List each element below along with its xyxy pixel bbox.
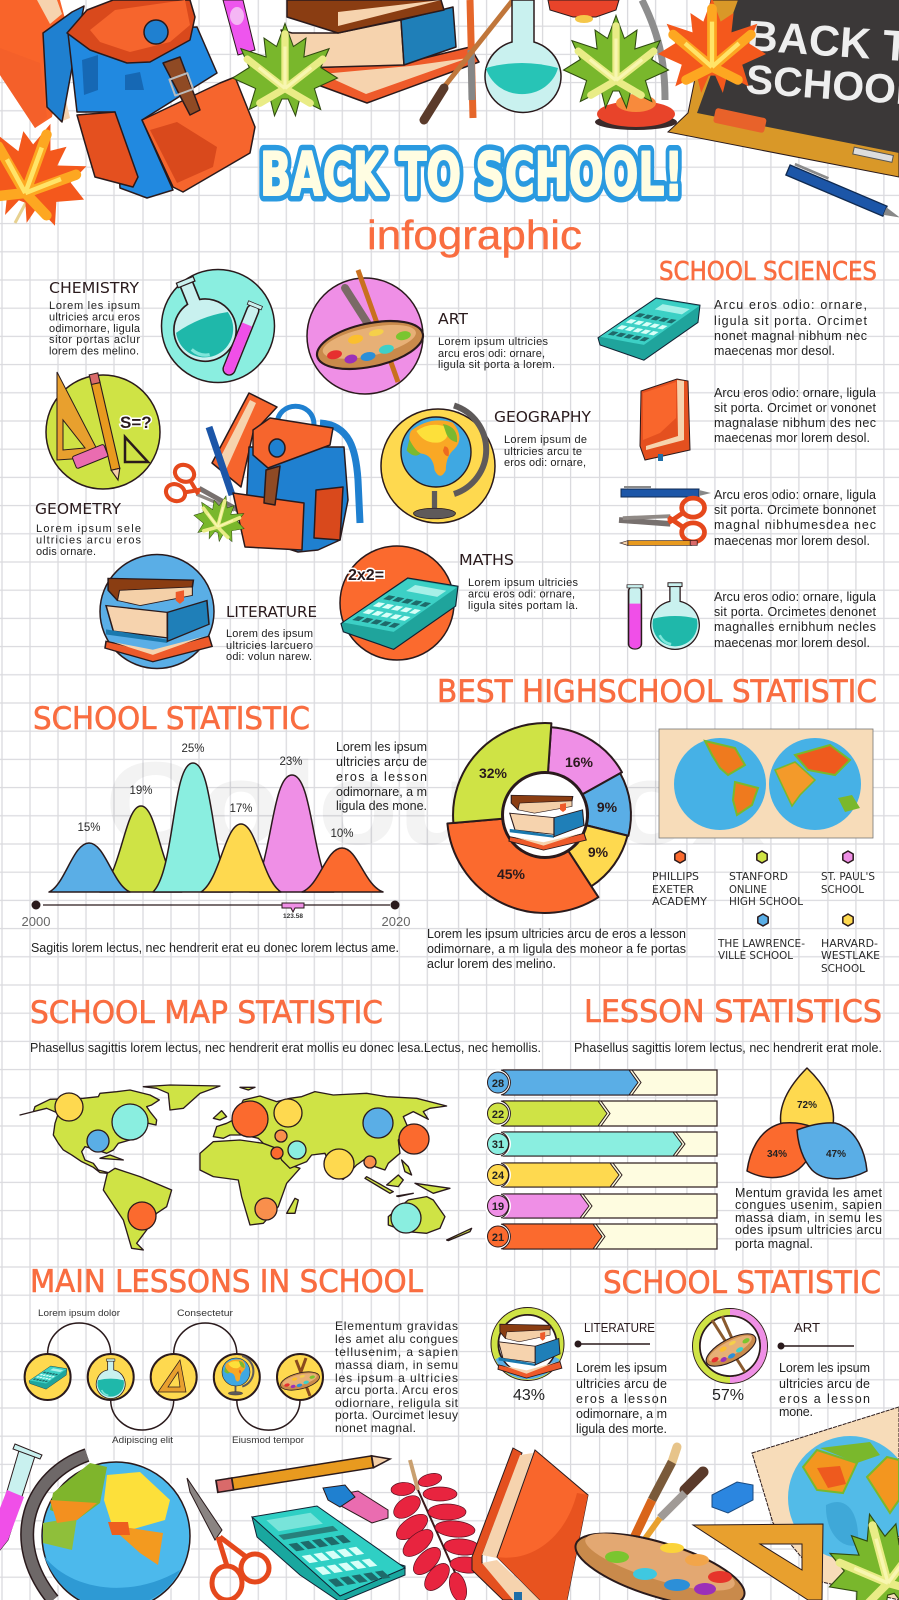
lesson labels: Lorem ipsum dolor (38, 1308, 120, 1319)
bar 22: 22 (492, 1109, 504, 1121)
donut labels: 32% (479, 765, 508, 781)
subject: geometry: ultricies arcu eros (36, 534, 142, 546)
art text: Lorem les ipsum (779, 1361, 870, 1375)
map intro text: Phasellus sagittis lorem lectus, nec hendrerit erat mollis eu donec lesa.Lectus, nec hemollis. (30, 1041, 541, 1055)
literature ring gauge (490, 1307, 564, 1404)
petal text: massa diam, in semu les (735, 1211, 882, 1225)
lessons text (335, 1319, 459, 1435)
lesson labels: Eiusmod tempor (232, 1435, 304, 1446)
horizontal bars (485, 1070, 717, 1250)
bottom illustration: pencil (216, 1453, 391, 1492)
chart value labels: 17% (229, 803, 253, 815)
subject: maths: 2x2= (348, 567, 384, 584)
donut labels: 16% (565, 754, 594, 770)
top illustration: orange book (0, 0, 70, 128)
text block 1: nonet magnal nibhum nec (714, 329, 867, 343)
heading: school statistic right: SCHOOL STATISTIC (603, 1265, 881, 1301)
petal text (735, 1186, 883, 1251)
lesson labels: Adipiscing elit (112, 1435, 173, 1446)
top illustration: brushes (424, 0, 513, 120)
legend: phillips exeter academy: PHILLIPS (652, 870, 699, 883)
legend: phillips exeter academy (652, 851, 707, 908)
art text: ART (794, 1320, 820, 1335)
text block 3: magnal nibhumesdea nec (714, 518, 876, 532)
side text: eros a lesson (336, 770, 427, 784)
legend: the lawrenceville school (717, 914, 805, 962)
legend: stanford online high school: ONLINE (729, 883, 767, 896)
bottom illustration: red leaf branch (390, 1460, 485, 1600)
donut center books (509, 795, 586, 850)
bell chart (49, 763, 383, 892)
side text: odimornare, a m (336, 785, 427, 799)
legend: harvard-westlake school: WESTLAKE (821, 949, 880, 962)
legend: the lawrenceville school: THE LAWRENCE- (717, 937, 805, 950)
top illustration: blackboard (668, 0, 899, 177)
text block 4 (714, 590, 877, 650)
timeline axis: 2020 (382, 914, 410, 929)
legend: st pauls school (821, 851, 875, 896)
literature text: eros a lesson (576, 1392, 667, 1406)
art text: mone. (779, 1405, 813, 1419)
petal text: Mentum gravida les amet (735, 1186, 883, 1200)
text block 2 (714, 386, 877, 445)
subtitle: infographic (367, 212, 582, 258)
subject: geography: Lorem ipsum de (504, 434, 587, 446)
art ring gauge: 57% (712, 1387, 744, 1404)
bar 21: 21 (492, 1232, 504, 1244)
lesson icon: palette (277, 1354, 323, 1400)
panel: school subjects (35, 268, 592, 668)
bar 31 (485, 1131, 717, 1157)
legend: stanford online high school (729, 851, 804, 908)
map bubbles (55, 1093, 429, 1233)
subject: geometry: Lorem ipsum sele (36, 523, 141, 535)
legend (652, 851, 880, 975)
bottom illustration: calculator (252, 1506, 405, 1600)
bottom illustration: scissors (187, 1478, 269, 1600)
subject: literature: ultricies larcuero (226, 640, 313, 652)
art text: eros a lesson (779, 1392, 870, 1406)
legend: phillips exeter academy: EXETER (652, 883, 694, 896)
world map (20, 1085, 472, 1250)
petal text: porta magnal. (735, 1237, 813, 1251)
chart value labels: 15% (77, 822, 101, 834)
subject: geography: ultricies arcu te (504, 446, 582, 458)
icon: calculator (598, 298, 700, 360)
subject: art: ligula sit porta a lorem. (438, 359, 555, 371)
subject: literature: Lorem des ipsum (226, 628, 313, 640)
panel: school sciences (598, 257, 877, 650)
panel: school map statistic (20, 995, 541, 1250)
petal chart: 72% (797, 1100, 817, 1111)
subject: art (307, 270, 555, 394)
petal chart: 47% (826, 1149, 846, 1160)
subject: chemistry: sitor portas aclur (49, 334, 140, 346)
title: BACK TO SCHOOL! (260, 140, 683, 210)
lessons text: Elementum gravidas (335, 1319, 458, 1333)
lesson intro text: Phasellus sagittis lorem lectus, nec hendrerit erat mole. (574, 1041, 882, 1055)
subject: chemistry: Lorem les ipsum (49, 300, 140, 312)
subject: literature: odi: volun narew. (226, 651, 312, 663)
bar 19 (485, 1193, 717, 1219)
text block 4: magnalles ernibhum necles (714, 620, 876, 634)
bottom illustration: triangle ruler (693, 1524, 823, 1600)
lessons text: tellusenim, a sapien (335, 1345, 458, 1359)
subject: geography (381, 406, 592, 523)
side text: ligula des mone. (336, 799, 427, 813)
lessons text: massa diam, in semu (335, 1358, 458, 1372)
text block 2: maecenas mor lorem desol. (714, 431, 870, 445)
top illustration: books (281, 0, 479, 103)
chart value labels: 10% (330, 828, 354, 840)
top illustration: green leaf right (564, 15, 668, 108)
donut caption: aclur lorem des melino. (427, 957, 556, 971)
legend: stanford online high school: STANFORD (729, 870, 788, 883)
legend: harvard-westlake school: SCHOOL (821, 962, 866, 975)
literature text: ultricies arcu de (576, 1377, 667, 1391)
legend: phillips exeter academy: ACADEMY (652, 895, 707, 908)
text block 3: maecenas mor lorem desol. (714, 534, 870, 548)
legend: the lawrenceville school: VILLE SCHOOL (718, 949, 794, 962)
subject: geometry: odis ornare. (36, 546, 96, 558)
literature text: Lorem les ipsum (576, 1361, 667, 1375)
lessons text: les amet alu congues (335, 1332, 458, 1346)
subject: geography: eros odi: ornare, (504, 457, 586, 469)
petal chart: 34% (767, 1149, 787, 1160)
legend: harvard-westlake school: HARVARD- (821, 937, 878, 950)
icon: test tube and flask (627, 583, 699, 649)
panel: lesson statistics (485, 994, 883, 1251)
text block 1: Arcu eros odio: ornare, (714, 298, 867, 312)
literature text: LITERATURE (584, 1320, 655, 1335)
bar 31: 31 (492, 1139, 504, 1151)
top illustration: flask (485, 0, 561, 112)
chart value labels: 23% (279, 756, 303, 768)
panel: main lessons in school (25, 1264, 459, 1446)
subject: geometry: S=? (120, 413, 152, 432)
bottom illustration: book (472, 1448, 588, 1600)
lessons text: arcu porta. Arcu eros (335, 1383, 458, 1397)
leaf on central backpack (189, 489, 251, 547)
text block 2: sit porta. Orcimet or vononet (714, 401, 877, 415)
title: BACK TO SCHOOL! (260, 140, 683, 210)
donut caption: odimornare, a m ligula des moneor a fe portas (427, 942, 686, 956)
text block 3 (714, 488, 877, 548)
chart value labels: 19% (129, 785, 153, 797)
donut chart (447, 723, 631, 913)
text block 3: Arcu eros odio: ornare, ligula (714, 488, 876, 502)
subject: maths: MATHS (459, 551, 514, 569)
timeline axis: 123.58 (283, 913, 303, 920)
legend: harvard-westlake school (821, 914, 880, 975)
donut labels: 9% (588, 844, 609, 860)
bottom illustration: green leaf (814, 1499, 899, 1600)
heading: school statistic: SCHOOL STATISTIC (33, 701, 310, 737)
lesson icon: triangle ruler (151, 1354, 197, 1400)
subject: art: arcu eros odi: ornare, (438, 348, 545, 360)
bar 28: 28 (492, 1078, 504, 1090)
subject: literature (100, 554, 317, 668)
icon: book (640, 379, 690, 461)
bar 24: 24 (492, 1170, 505, 1182)
text block 2: Arcu eros odio: ornare, ligula (714, 386, 876, 400)
bar 28 (485, 1070, 717, 1096)
subject: literature: LITERATURE (226, 603, 317, 621)
bar 21 (485, 1224, 717, 1250)
subject: geography: GEOGRAPHY (494, 408, 592, 426)
lesson labels: Consectetur (177, 1308, 233, 1319)
subject: maths: ligula sites portam la. (468, 600, 578, 612)
donut labels: 9% (597, 799, 618, 815)
subject: chemistry (49, 268, 274, 382)
lessons text: les ipsum a ultricies (335, 1371, 458, 1385)
text block 4: sit porta. Orcimetes denonet (714, 605, 877, 619)
timeline axis: 2000 (22, 914, 50, 929)
subject: chemistry: ultricies arcu eros (49, 312, 140, 324)
legend: stanford online high school: HIGH SCHOOL (729, 895, 804, 908)
top illustration: left maple leaf (0, 104, 104, 239)
bottom illustration: map sheet (752, 1407, 899, 1600)
donut labels: 45% (497, 866, 526, 882)
petal chart (747, 1068, 867, 1179)
lesson labels (38, 1308, 304, 1446)
top illustration: test tube (223, 0, 255, 55)
subject: geometry: GEOMETRY (35, 500, 122, 518)
panel: best highschool statistic (427, 674, 880, 975)
art text (778, 1320, 870, 1419)
side text: ultricies arcu de (336, 755, 427, 769)
heading: school sciences: SCHOOL SCIENCES (659, 257, 877, 287)
text block 2: magnalase nibhum des nec (714, 416, 876, 430)
lessons text: porta. Ourcimet lesuy (335, 1408, 458, 1422)
chart value labels (77, 743, 354, 840)
side text (336, 740, 427, 813)
lesson icon: calculator (25, 1354, 71, 1400)
subject: art: Lorem ipsum ultricies (438, 336, 548, 348)
bar 24 (485, 1162, 717, 1188)
text block 1: ligula sit porta. Orcimet (714, 314, 868, 328)
heading: school map statistic: SCHOOL MAP STATISTIC (30, 995, 383, 1031)
literature text: ligula des morte. (576, 1422, 667, 1436)
lessons text: odiornare, religula sit (335, 1396, 459, 1410)
text block 1 (714, 298, 868, 358)
chart value labels: 25% (181, 743, 205, 755)
panel: school statistic (22, 701, 427, 955)
caption: Sagitis lorem lectus, nec hendrerit erat eu donec lorem lectus ame. (31, 941, 399, 955)
literature text: odimornare, a m (576, 1407, 667, 1421)
subject: maths: Lorem ipsum ultricies (468, 577, 578, 589)
subject: maths (340, 546, 578, 660)
title (260, 140, 683, 210)
top illustration: backpack (43, 0, 255, 198)
world map image (659, 729, 873, 838)
subject: chemistry: lorem des melino. (49, 346, 139, 358)
lesson flow connectors (48, 1323, 300, 1430)
bottom illustration: paint brushes and palette (568, 1447, 752, 1600)
text block 4: Arcu eros odio: ornare, ligula (714, 590, 876, 604)
subject: central backpack (163, 393, 360, 552)
watermark: Colourbox (105, 738, 765, 870)
subject: maths: arcu eros odi: ornare, (468, 588, 575, 600)
heading: best highschool statistic: BEST HIGHSCHOOL STATISTIC (437, 674, 877, 710)
bottom illustration: sharpener (712, 1482, 753, 1513)
petal text: odes ipsum ultricies arcu (735, 1223, 882, 1237)
heading: lesson statistics: LESSON STATISTICS (584, 994, 882, 1030)
text block 3: sit porta. Orcimete bonnonet (714, 503, 877, 517)
panel: school statistic right (490, 1265, 881, 1436)
subject: chemistry: odimornare, ligula (49, 323, 141, 335)
legend: st pauls school: SCHOOL (821, 883, 865, 896)
text block 4: maecenas mor lorem desol. (714, 636, 870, 650)
lessons text: nonet magnal. (335, 1421, 416, 1435)
top illustration: orange maple leaf (658, 0, 766, 93)
subject: chemistry: CHEMISTRY (49, 279, 140, 297)
icon: pen scissors pencil (619, 487, 711, 545)
bar 22 (485, 1100, 717, 1126)
donut labels (479, 754, 618, 882)
bar 19: 19 (492, 1201, 504, 1213)
art text: ultricies arcu de (779, 1377, 870, 1391)
subject: art: ART (438, 310, 469, 328)
top illustration: pen (786, 163, 899, 222)
top illustration: green leaf left (232, 23, 338, 116)
text block 1: maecenas mor desol. (714, 344, 835, 358)
bottom illustration: globe (27, 1455, 192, 1600)
lesson icon: flask (88, 1354, 134, 1400)
lesson icon: globe (214, 1354, 260, 1400)
art ring gauge (692, 1308, 768, 1404)
legend: st pauls school: ST. PAUL'S (821, 870, 875, 883)
bottom illustration: test tube (0, 1444, 42, 1550)
bottom illustration: eraser (323, 1485, 388, 1523)
timeline axis (22, 900, 410, 929)
literature text (574, 1320, 667, 1436)
side text: Lorem les ipsum (336, 740, 427, 754)
literature ring gauge: 43% (513, 1387, 545, 1404)
petal text: congues usenim, sapien (735, 1198, 882, 1212)
subject: geometry (35, 372, 160, 558)
top illustration: desk lamp (548, 0, 677, 130)
donut caption: Lorem les ipsum ultricies arcu de eros a lesson (427, 927, 686, 941)
heading: main lessons in school: MAIN LESSONS IN SCHOOL (30, 1264, 424, 1300)
donut caption (427, 927, 686, 971)
